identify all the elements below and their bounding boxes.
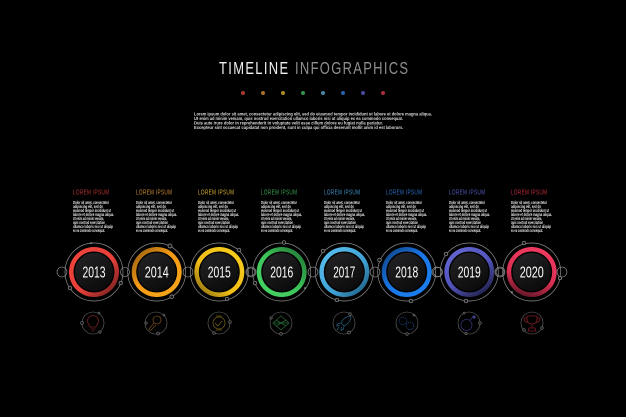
ring 2018 xyxy=(378,243,442,303)
text 2013: Ut enim ad minim veniam, xyxy=(73,216,104,221)
ring 2019: 2019 xyxy=(458,265,481,282)
text 2020: ex ea commodo consequat. xyxy=(511,228,543,233)
text 2019: labore et dolore magna aliqua. xyxy=(449,212,490,217)
text 2018 xyxy=(386,200,427,233)
text 2017: ex ea commodo consequat. xyxy=(324,228,356,233)
heading 2018: LOREM IPSUM xyxy=(386,190,422,197)
ring 2013 xyxy=(57,242,130,301)
heading 2014: LOREM IPSUM xyxy=(136,190,172,197)
column 2018 xyxy=(378,190,442,335)
intro paragraph xyxy=(194,112,432,130)
ring 2019 xyxy=(434,243,505,303)
text 2015: ex ea commodo consequat. xyxy=(198,228,230,233)
ring 2015: 2015 xyxy=(208,265,231,282)
heading 2015: LOREM IPSUM xyxy=(198,190,234,197)
text 2019: adipiscing elit, sed do xyxy=(449,204,479,209)
intro paragraph: Lorem ipsum dolor sit amet, consectetur adipiscing elit, sed do eiusmod tempor incididunt ut labore et dolore magna aliqua. xyxy=(194,112,432,116)
ring 2017: 2017 xyxy=(333,265,355,282)
column 2014 xyxy=(128,190,193,335)
heading 2020: LOREM IPSUM xyxy=(511,190,547,197)
text 2015: quis nostrud exercitation xyxy=(198,220,230,225)
text 2016: ex ea commodo consequat. xyxy=(261,228,293,233)
text 2014: labore et dolore magna aliqua. xyxy=(136,212,177,217)
text 2017 xyxy=(324,200,365,233)
text 2014: Ut enim ad minim veniam, xyxy=(136,216,167,221)
text 2015: adipiscing elit, sed do xyxy=(198,204,228,209)
ring 2020: 2020 xyxy=(520,265,544,282)
text 2016: eiusmod tempor incididunt ut xyxy=(261,208,299,213)
text 2018: quis nostrud exercitation xyxy=(386,220,418,225)
text 2016: adipiscing elit, sed do xyxy=(261,204,291,209)
text 2015: ullamco laboris nisi ut aliquip xyxy=(198,224,238,229)
text 2013: labore et dolore magna aliqua. xyxy=(73,212,114,217)
text 2014: adipiscing elit, sed do xyxy=(136,204,166,209)
text 2018: labore et dolore magna aliqua. xyxy=(386,212,427,217)
text 2020: Ut enim ad minim veniam, xyxy=(511,216,542,221)
heading 2013: LOREM IPSUM xyxy=(73,190,109,197)
text 2020: ullamco laboris nisi ut aliquip xyxy=(511,224,551,229)
title xyxy=(219,59,408,79)
title: INFOGRAPHICS xyxy=(295,59,408,79)
text 2015: Dolor sit amet, consectetur xyxy=(198,200,234,205)
text 2016: Dolor sit amet, consectetur xyxy=(261,200,297,205)
heading 2017: LOREM IPSUM xyxy=(324,190,360,197)
text 2016: labore et dolore magna aliqua. xyxy=(261,212,302,217)
text 2016: quis nostrud exercitation xyxy=(261,220,293,225)
column 2019 xyxy=(434,190,505,335)
ring 2016 xyxy=(247,241,318,301)
text 2020: Dolor sit amet, consectetur xyxy=(511,200,547,205)
ring 2014: 2014 xyxy=(145,265,169,282)
text 2013: quis nostrud exercitation xyxy=(73,220,105,225)
text 2015: eiusmod tempor incididunt ut xyxy=(198,208,236,213)
text 2020: quis nostrud exercitation xyxy=(511,220,543,225)
text 2017: Ut enim ad minim veniam, xyxy=(324,216,355,221)
ring 2014 xyxy=(128,243,193,301)
text 2020: eiusmod tempor incididunt ut xyxy=(511,208,549,213)
text 2017: ullamco laboris nisi ut aliquip xyxy=(324,224,364,229)
text 2019 xyxy=(449,200,490,233)
text 2014: eiusmod tempor incididunt ut xyxy=(136,208,174,213)
text 2013: ex ea commodo consequat. xyxy=(73,228,105,233)
text 2015 xyxy=(198,200,239,233)
text 2020: labore et dolore magna aliqua. xyxy=(511,212,552,217)
text 2018: adipiscing elit, sed do xyxy=(386,204,416,209)
text 2014: Dolor sit amet, consectetur xyxy=(136,200,172,205)
ring 2018: 2018 xyxy=(395,265,418,282)
text 2017: labore et dolore magna aliqua. xyxy=(324,212,365,217)
text 2016: Ut enim ad minim veniam, xyxy=(261,216,292,221)
column 2016 xyxy=(247,190,318,335)
icon: trophy xyxy=(521,312,543,334)
intro paragraph: Duis aute irure dolor in reprehenderit in voluptate velit esse cillum dolore eu fugiat nulla pariatur. xyxy=(194,120,383,126)
text 2018: eiusmod tempor incididunt ut xyxy=(386,208,424,213)
text 2017: eiusmod tempor incididunt ut xyxy=(324,208,362,213)
text 2014: ullamco laboris nisi ut aliquip xyxy=(136,224,176,229)
icon: bomb xyxy=(458,312,481,335)
text 2013: ullamco laboris nisi ut aliquip xyxy=(73,224,113,229)
text 2014: quis nostrud exercitation xyxy=(136,220,168,225)
text 2013: eiusmod tempor incididunt ut xyxy=(73,208,111,213)
text 2019: quis nostrud exercitation xyxy=(449,220,481,225)
text 2015: labore et dolore magna aliqua. xyxy=(198,212,239,217)
text 2013: adipiscing elit, sed do xyxy=(73,204,103,209)
text 2019: Dolor sit amet, consectetur xyxy=(449,200,485,205)
text 2014: ex ea commodo consequat. xyxy=(136,228,168,233)
text 2019: Ut enim ad minim veniam, xyxy=(449,216,480,221)
ring 2013: 2013 xyxy=(82,265,106,282)
text 2014 xyxy=(136,200,177,233)
text 2015: Ut enim ad minim veniam, xyxy=(198,216,229,221)
text 2019: ex ea commodo consequat. xyxy=(449,228,481,233)
heading 2016: LOREM IPSUM xyxy=(261,190,297,197)
text 2017: Dolor sit amet, consectetur xyxy=(324,200,360,205)
text 2020 xyxy=(511,200,552,233)
column 2020 xyxy=(496,190,567,334)
icon: gears xyxy=(396,312,418,335)
ring 2020 xyxy=(496,241,567,301)
text 2013: Dolor sit amet, consectetur xyxy=(73,200,109,205)
title: TIMELINE xyxy=(219,59,288,79)
text 2020: adipiscing elit, sed do xyxy=(511,204,541,209)
text 2017: adipiscing elit, sed do xyxy=(324,204,354,209)
column 2013 xyxy=(57,190,130,334)
ring 2016: 2016 xyxy=(270,265,293,282)
text 2016: ullamco laboris nisi ut aliquip xyxy=(261,224,301,229)
icon: clock xyxy=(208,312,231,334)
text 2018: ullamco laboris nisi ut aliquip xyxy=(386,224,426,229)
ring 2015 xyxy=(190,243,256,301)
intro paragraph: Ut enim ad minim veniam, quis nostrud exercitation ullamco laboris nisi ut aliquip ex ea commodo consequat. xyxy=(194,116,403,121)
text 2019: ullamco laboris nisi ut aliquip xyxy=(449,224,489,229)
icon: envelope xyxy=(270,312,292,335)
text 2019: eiusmod tempor incididunt ut xyxy=(449,208,487,213)
coloured dot row xyxy=(241,91,385,95)
text 2017: quis nostrud exercitation xyxy=(324,220,356,225)
intro paragraph: Excepteur sint occaecat cupidatat non proident, sunt in culpa qui officia deserunt mollit anim id est laborum. xyxy=(194,125,403,130)
text 2016 xyxy=(261,200,302,233)
text 2013 xyxy=(73,200,114,233)
column 2017 xyxy=(315,190,380,334)
text 2018: Dolor sit amet, consectetur xyxy=(386,200,422,205)
icon: rocket xyxy=(333,312,355,334)
icon: light bulb xyxy=(81,312,104,334)
text 2018: ex ea commodo consequat. xyxy=(386,228,418,233)
icon: magnifier xyxy=(145,312,167,335)
heading 2019: LOREM IPSUM xyxy=(449,190,485,197)
column 2015 xyxy=(190,190,256,334)
text 2018: Ut enim ad minim veniam, xyxy=(386,216,417,221)
ring 2017 xyxy=(315,243,380,302)
